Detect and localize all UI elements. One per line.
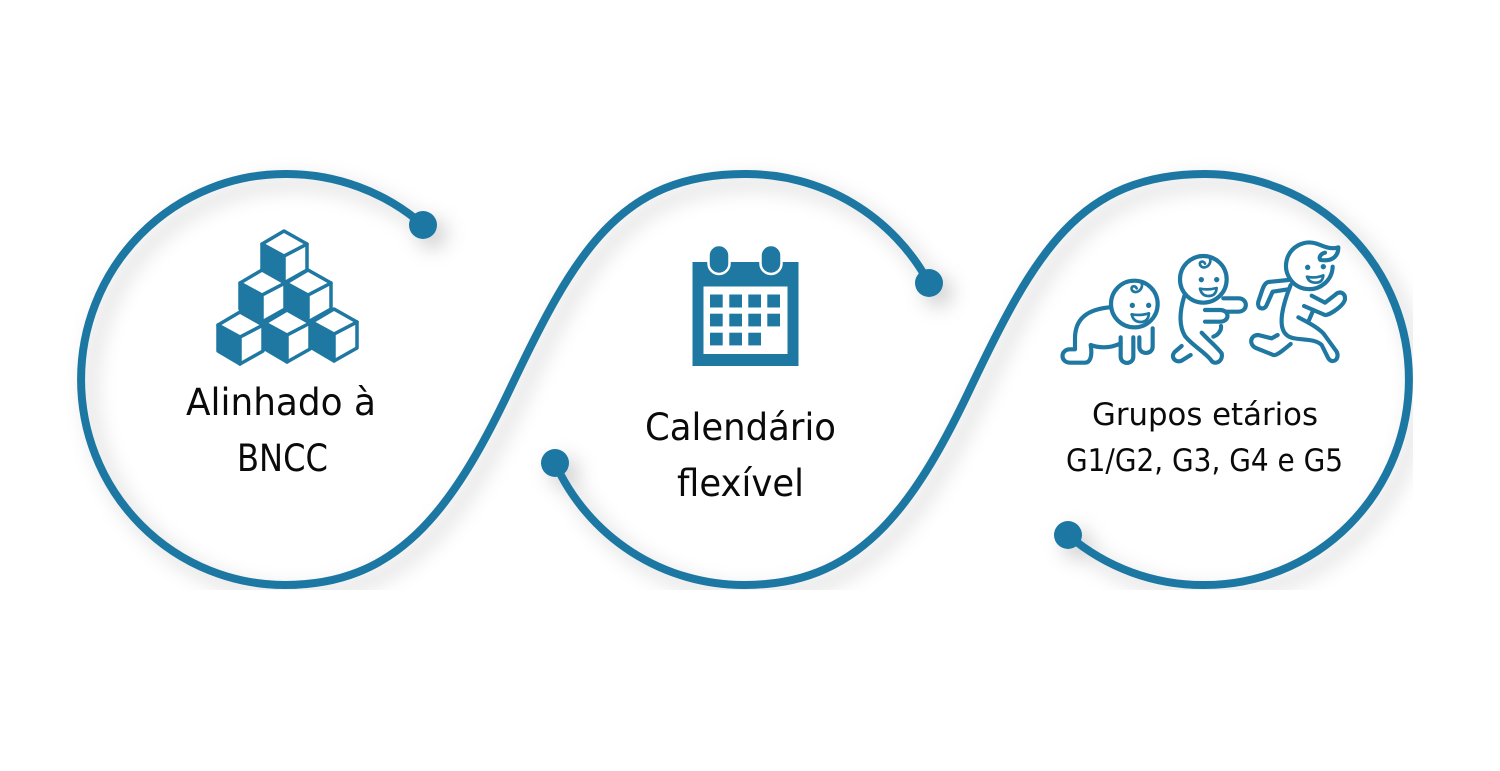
panel: age groups — [1062, 242, 1345, 479]
label: Grupos etários — [1066, 397, 1343, 479]
label: Calendário flexível: Calendário — [645, 406, 836, 449]
label: Alinhado à BNCC: BNCC — [237, 437, 328, 480]
panel: BNCC — [186, 231, 376, 480]
icon: crawling baby — [1062, 281, 1158, 363]
infographic — [77, 170, 1413, 590]
icon: calendar — [692, 245, 798, 366]
icon: walking toddler — [1173, 256, 1246, 363]
label: Calendário flexível: flexível — [677, 462, 804, 505]
panel: calendar — [645, 245, 836, 505]
flowing line with three loops — [81, 174, 1409, 585]
icon: three children — [1062, 242, 1345, 363]
icon: stacked cubes — [218, 231, 357, 364]
label: Alinhado à BNCC: Alinhado à — [186, 381, 376, 424]
icon: running child — [1251, 242, 1345, 361]
label: Grupos etários: Grupos etários — [1092, 397, 1318, 433]
label: Calendário flexível — [645, 406, 836, 505]
label: Alinhado à BNCC — [186, 381, 376, 480]
label: Grupos etários: G1/G2, G3, G4 e G5 — [1066, 443, 1343, 479]
